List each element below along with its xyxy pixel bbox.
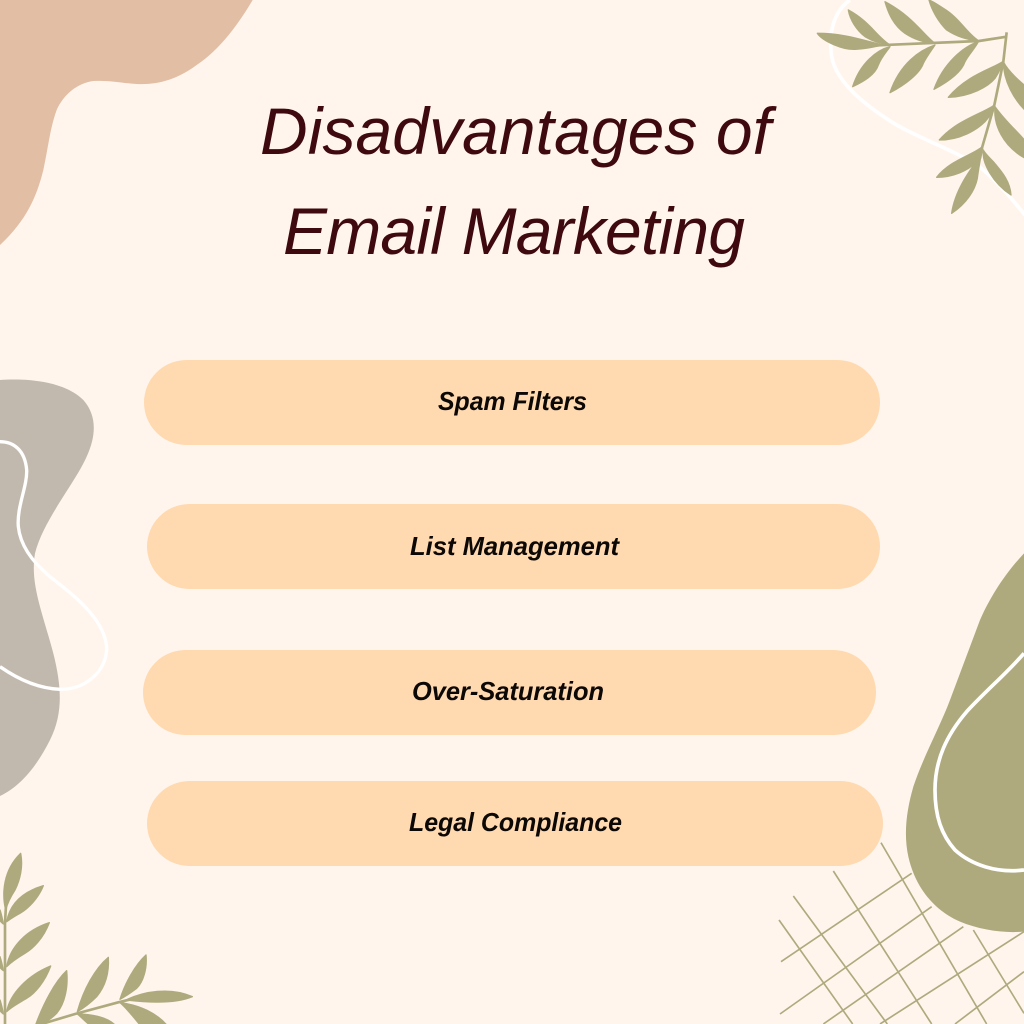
blob: right olive with white curve	[906, 553, 1024, 932]
pill: Over-Saturation	[143, 650, 876, 735]
icon: bottom-left leaf branches	[0, 853, 192, 1024]
pill: Spam Filters	[144, 360, 880, 445]
blob: left grey with white curve	[0, 380, 107, 796]
grid lines bottom-right	[779, 843, 1024, 1024]
pill: Over-Saturation: Over-Saturation	[412, 676, 604, 706]
pill: List Management	[147, 504, 880, 589]
pill: List Management: List Management	[410, 531, 620, 561]
title: Email Marketing	[283, 194, 745, 268]
pill: Spam Filters: Spam Filters	[438, 386, 587, 416]
title: Disadvantages of	[260, 94, 778, 168]
pill: Legal Compliance	[147, 781, 883, 866]
pill: Legal Compliance: Legal Compliance	[409, 807, 622, 837]
icon: top-right leaf branch with white curve	[817, 0, 1024, 215]
title	[260, 94, 778, 268]
blob: top-left peach	[0, 0, 253, 245]
